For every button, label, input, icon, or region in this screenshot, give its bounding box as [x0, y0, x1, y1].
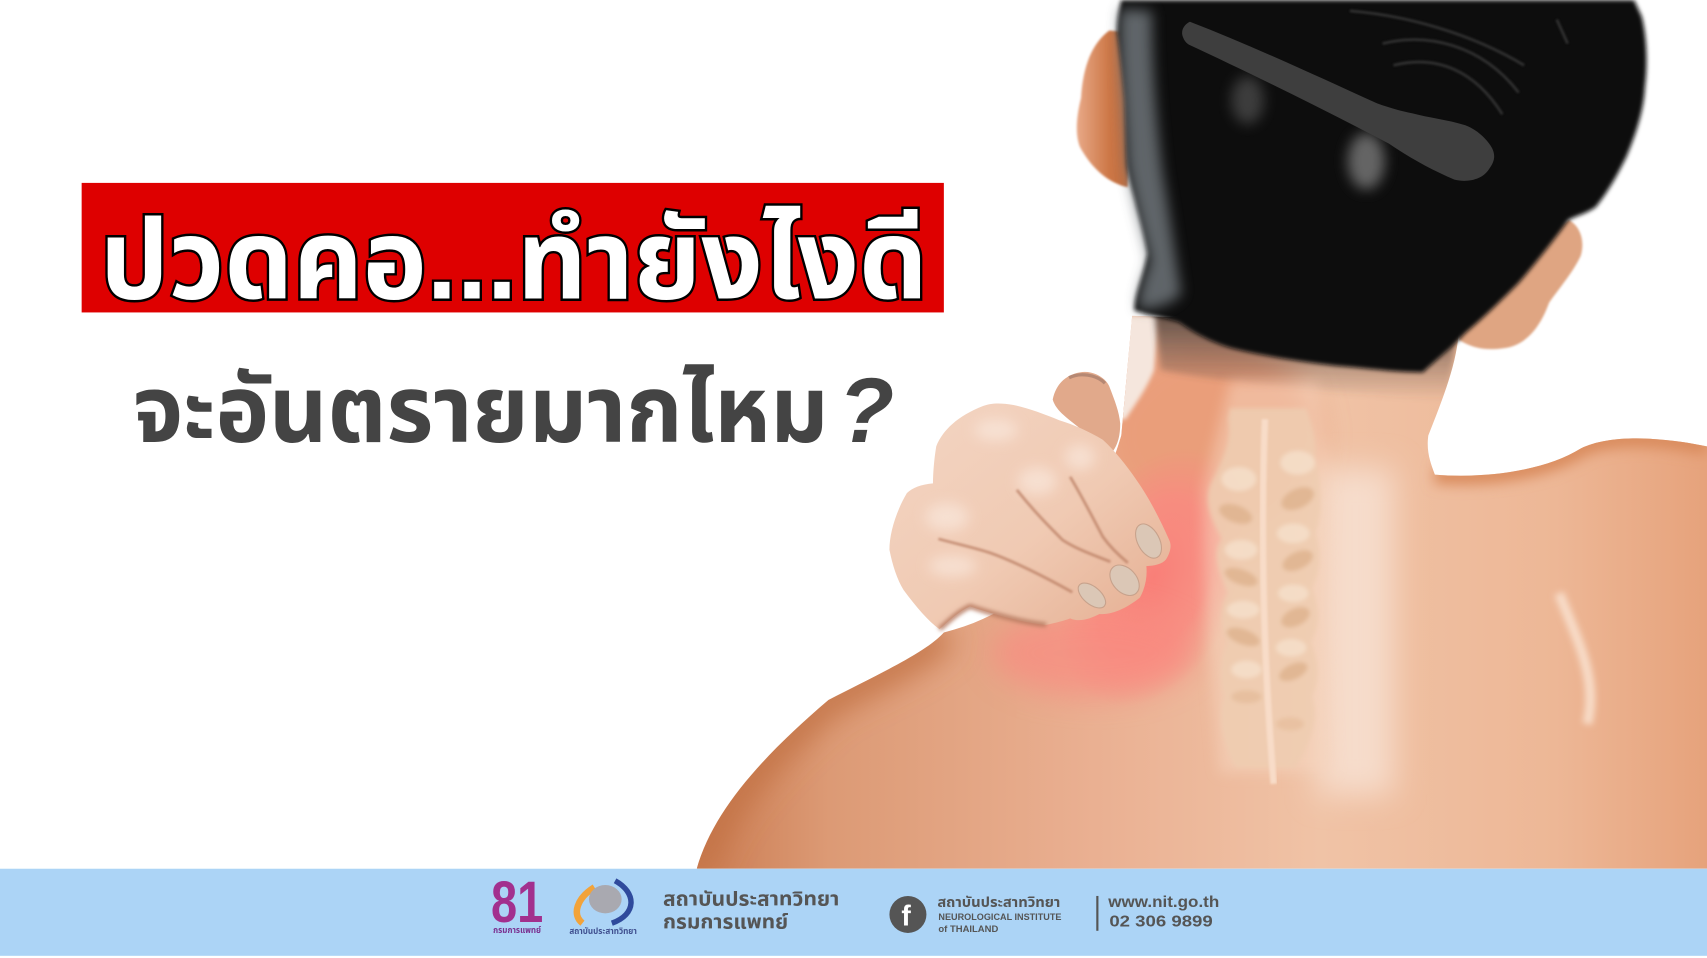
hair clip [1182, 22, 1494, 181]
logo caption: สถาบันประสาทวิทยา [569, 926, 637, 936]
letter f: f [901, 899, 911, 931]
fingernails [1074, 520, 1167, 613]
website: www.nit.go.th [1107, 894, 1219, 911]
spine [1203, 381, 1334, 784]
left ear [1077, 30, 1132, 187]
pale nape [1122, 316, 1158, 422]
spine halo [1203, 381, 1334, 773]
grey left band [1119, 9, 1181, 309]
hair curls [1350, 11, 1568, 114]
photo: woman holding her neck [686, 0, 1707, 871]
circle [889, 896, 926, 933]
english name line one: NEUROLOGICAL INSTITUTE [938, 912, 1061, 922]
lower glow [991, 610, 1198, 697]
thai name: สถาบันประสาทวิทยา [937, 894, 1060, 910]
skin base [686, 305, 1707, 871]
institute name [663, 889, 839, 934]
banner heading: ปวดคอ...ทำยังไงดี [100, 197, 928, 322]
subtitle [133, 357, 894, 462]
shadow under hair [1150, 316, 1458, 396]
logo: neurological institute [569, 881, 637, 936]
shoulder edge shade [1435, 438, 1707, 476]
hair mass [1117, 0, 1647, 372]
phone: 02 306 9899 [1109, 913, 1213, 930]
hand [889, 372, 1171, 629]
finger creases [938, 477, 1128, 592]
footer background [0, 869, 1707, 956]
palm and fingers [889, 403, 1171, 629]
neck warm tone [1116, 341, 1328, 502]
pale band right of spine [1317, 468, 1393, 795]
facebook page name [937, 894, 1061, 934]
question mark: ? [838, 360, 894, 462]
number 81: 81 [491, 870, 543, 935]
pain glow [1080, 473, 1224, 680]
red banner [82, 183, 944, 312]
hair [1117, 0, 1647, 372]
line two: กรมการแพทย์ [663, 912, 788, 934]
title banner [82, 183, 944, 322]
thumb [1053, 372, 1120, 452]
subtitle text: จะอันตรายมากไหม [133, 357, 828, 462]
hair sheen upper [1231, 76, 1264, 124]
shoulder highlight [1559, 593, 1590, 724]
spinal cord [1263, 419, 1274, 784]
vertebrae [1208, 408, 1321, 767]
hand lower shadow [940, 606, 1046, 629]
english name line two: of THAILAND [938, 924, 999, 934]
right ear [1459, 220, 1582, 349]
blue arc [612, 881, 631, 923]
hair sheen [1348, 133, 1385, 189]
icon: facebook [889, 896, 926, 933]
orange arc [577, 887, 594, 923]
line one: สถาบันประสาทวิทยา [663, 889, 839, 911]
knuckle highlights [925, 419, 1095, 577]
grey brain [589, 885, 622, 913]
logo: 81 years [491, 870, 543, 935]
back and shoulders [686, 305, 1707, 871]
logo caption: กรมการแพทย์ [493, 925, 541, 935]
left shoulder edge shade [697, 632, 944, 869]
contact details [1107, 894, 1219, 930]
footer band [0, 869, 1707, 956]
thumb nail [1069, 375, 1105, 383]
